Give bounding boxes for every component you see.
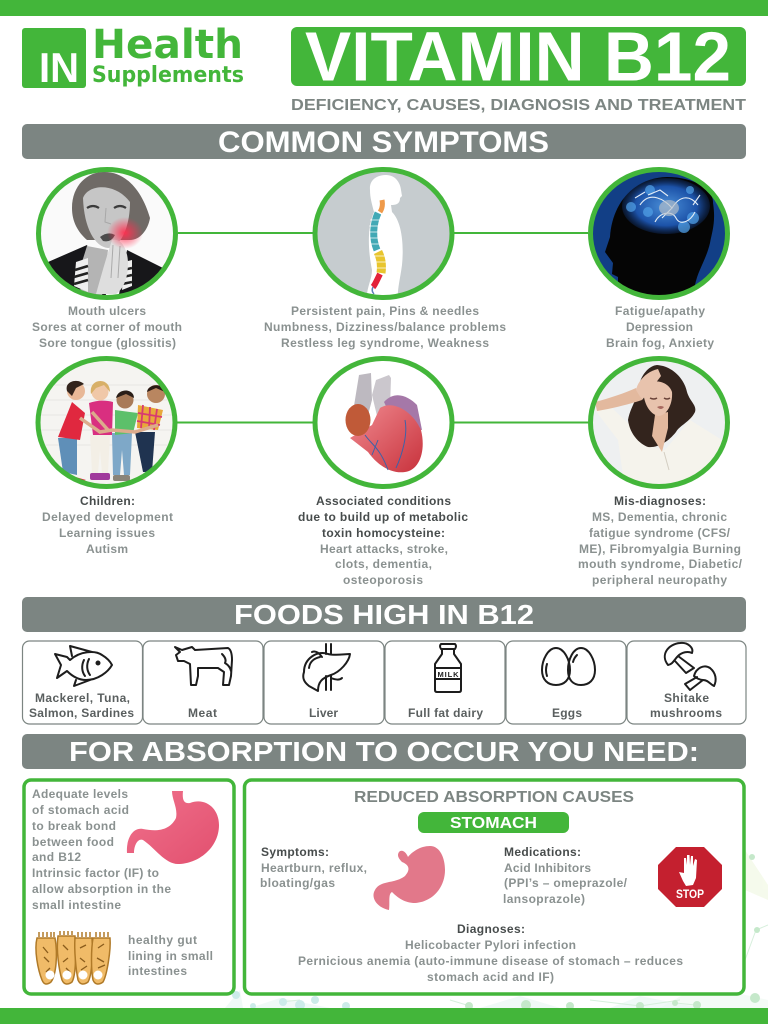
food card: mushrooms: Shitake	[664, 691, 709, 705]
text: children: Autism	[86, 542, 128, 556]
text: mouth symptoms: Mouth ulcers	[68, 304, 146, 318]
text: medications: Medications:	[504, 845, 581, 859]
text: healthy gut lining: lining in small	[128, 949, 213, 963]
text: stomach acid and intrinsic factor: small intestine	[32, 898, 121, 912]
text: associated conditions	[298, 494, 468, 587]
text: medications	[503, 845, 628, 906]
food card: eggs	[506, 641, 626, 724]
logo: InHealth Supplements: IN	[39, 44, 79, 91]
icon: cow	[175, 647, 232, 685]
food card: mushrooms	[627, 641, 746, 724]
text: mis-diagnoses: Mis-diagnoses:	[614, 494, 706, 508]
text: symptoms: bloating/gas	[260, 876, 335, 890]
food card: dairy	[385, 641, 505, 724]
panel: what you need	[24, 780, 234, 994]
logo: InHealth Supplements	[22, 22, 244, 91]
heading: for absorption to occur you need	[22, 734, 746, 769]
text: mis-diagnoses: MS, Dementia, chronic	[592, 510, 727, 524]
icon: stop sign: STOP	[676, 887, 704, 901]
text: nerve symptoms	[264, 304, 506, 350]
icon: liver	[303, 644, 350, 691]
text: medications: Acid Inhibitors	[504, 861, 591, 875]
text: diagnoses: stomach acid and IF)	[427, 970, 554, 984]
panel heading: REDUCED ABSORPTION CAUSES	[354, 789, 634, 806]
text: symptoms	[260, 845, 367, 890]
image: brain network in head silhouette	[588, 167, 730, 300]
food card: liver	[264, 641, 384, 724]
image: anatomical heart	[312, 356, 454, 489]
bottom green bar	[0, 1008, 768, 1024]
icon: stomach illustration	[373, 846, 445, 910]
subtitle: DEFICIENCY, CAUSES, DIAGNOSIS AND TREATMENT	[291, 97, 746, 114]
heading: foods high in B12: FOODS HIGH IN B12	[234, 599, 534, 630]
icon: mushrooms	[665, 643, 716, 690]
text: associated conditions: osteoporosis	[343, 573, 423, 587]
text: mouth symptoms	[32, 304, 182, 350]
logo: InHealth Supplements: Supplements	[92, 63, 244, 88]
connector row 1	[178, 232, 588, 234]
text: children: Children:	[80, 494, 135, 508]
heading: common symptoms	[22, 124, 746, 159]
text: stomach acid and intrinsic factor	[32, 787, 171, 912]
text: medications: lansoprazole)	[503, 892, 585, 906]
food card: meat	[143, 641, 263, 724]
text: mis-diagnoses: peripheral neuropathy	[592, 573, 727, 587]
text: nerve symptoms: Restless leg syndrome, Weakness	[281, 336, 489, 350]
text: mouth symptoms: Sore tongue (glossitis)	[39, 336, 176, 350]
text: nerve symptoms: Persistent pain, Pins & needles	[291, 304, 479, 318]
stomach label pill	[418, 812, 569, 833]
heading: foods high in B12	[22, 597, 746, 632]
text: stomach acid and intrinsic factor: and B12	[32, 850, 81, 864]
panel: reduced absorption causes	[244, 780, 744, 994]
photo: woman with mouth pain	[36, 167, 178, 300]
text: mental symptoms	[606, 304, 714, 350]
food card: fish: Salmon, Sardines	[29, 706, 134, 720]
food card: fish	[22, 641, 142, 724]
text: stomach acid and intrinsic factor: between food	[32, 835, 114, 849]
text: diagnoses: Diagnoses:	[457, 922, 525, 936]
text: diagnoses: Pernicious anemia (auto-immune disease of stomach – reduces	[298, 954, 683, 968]
food card: mushrooms: mushrooms	[650, 706, 722, 720]
text: mental symptoms: Brain fog, Anxiety	[606, 336, 714, 350]
food card: eggs: Eggs	[552, 706, 582, 720]
text: associated conditions: due to build up of metabolic	[298, 510, 468, 524]
title banner: VITAMIN B12	[305, 18, 731, 96]
text: associated conditions: Heart attacks, stroke,	[320, 542, 448, 556]
icon: stomach	[127, 791, 219, 864]
text: stomach acid and intrinsic factor: Adequate levels	[32, 787, 128, 801]
icon: eggs	[542, 648, 595, 685]
top green bar	[0, 0, 768, 16]
text: children: Learning issues	[59, 526, 155, 540]
icon: intestinal gut cells	[36, 931, 110, 984]
text: medications: (PPI’s – omeprazole/	[504, 876, 628, 890]
connector row 2	[177, 422, 588, 424]
text: stomach acid and intrinsic factor: to break bond	[32, 819, 116, 833]
text: mis-diagnoses: fatigue syndrome (CFS/	[589, 526, 731, 540]
text: mental symptoms: Fatigue/apathy	[615, 304, 705, 318]
text: mental symptoms: Depression	[626, 320, 693, 334]
food card: fish: Mackerel, Tuna,	[35, 691, 130, 705]
text: children	[42, 494, 173, 556]
logo: InHealth Supplements: Health	[92, 22, 243, 68]
text: stomach acid and intrinsic factor: of stomach acid	[32, 803, 129, 817]
text: mouth symptoms: Sores at corner of mouth	[32, 320, 182, 334]
text: healthy gut lining	[128, 933, 213, 978]
food card: liver: Liver	[309, 706, 338, 720]
text: associated conditions: toxin homocysteine:	[322, 526, 445, 540]
text: associated conditions: clots, dementia,	[335, 557, 432, 571]
text: mis-diagnoses: mouth syndrome, Diabetic/	[578, 557, 743, 571]
photo: four children	[36, 356, 178, 489]
image: spine in body silhouette	[312, 167, 454, 300]
background molecule pattern	[225, 850, 768, 1010]
photo: woman with headache	[588, 356, 730, 489]
text: diagnoses: Helicobacter Pylori infection	[405, 938, 576, 952]
stomach label pill: STOMACH	[450, 815, 537, 832]
text: mis-diagnoses: ME), Fibromyalgia Burning	[579, 542, 741, 556]
food card: dairy: Full fat dairy	[408, 706, 483, 720]
icon: milk bottle: MILK	[438, 670, 459, 679]
heading: common symptoms: COMMON SYMPTOMS	[218, 126, 549, 159]
food card: meat: Meat	[188, 706, 217, 720]
text: stomach acid and intrinsic factor: Intrinsic factor (IF) to	[32, 866, 159, 880]
text: healthy gut lining: healthy gut	[128, 933, 197, 947]
text: diagnoses	[298, 922, 683, 984]
text: stomach acid and intrinsic factor: allow absorption in the	[32, 882, 171, 896]
text: mis-diagnoses	[578, 494, 743, 587]
text: symptoms: Heartburn, reflux,	[261, 861, 367, 875]
icon: stop sign	[658, 847, 722, 907]
text: associated conditions: Associated conditions	[316, 494, 451, 508]
icon: fish	[55, 646, 112, 686]
text: symptoms: Symptoms:	[261, 845, 329, 859]
text: children: Delayed development	[42, 510, 173, 524]
heading: for absorption to occur you need: FOR ABSORPTION TO OCCUR YOU NEED:	[69, 736, 699, 767]
text: healthy gut lining: intestines	[128, 964, 187, 978]
text: nerve symptoms: Numbness, Dizziness/balance problems	[264, 320, 506, 334]
